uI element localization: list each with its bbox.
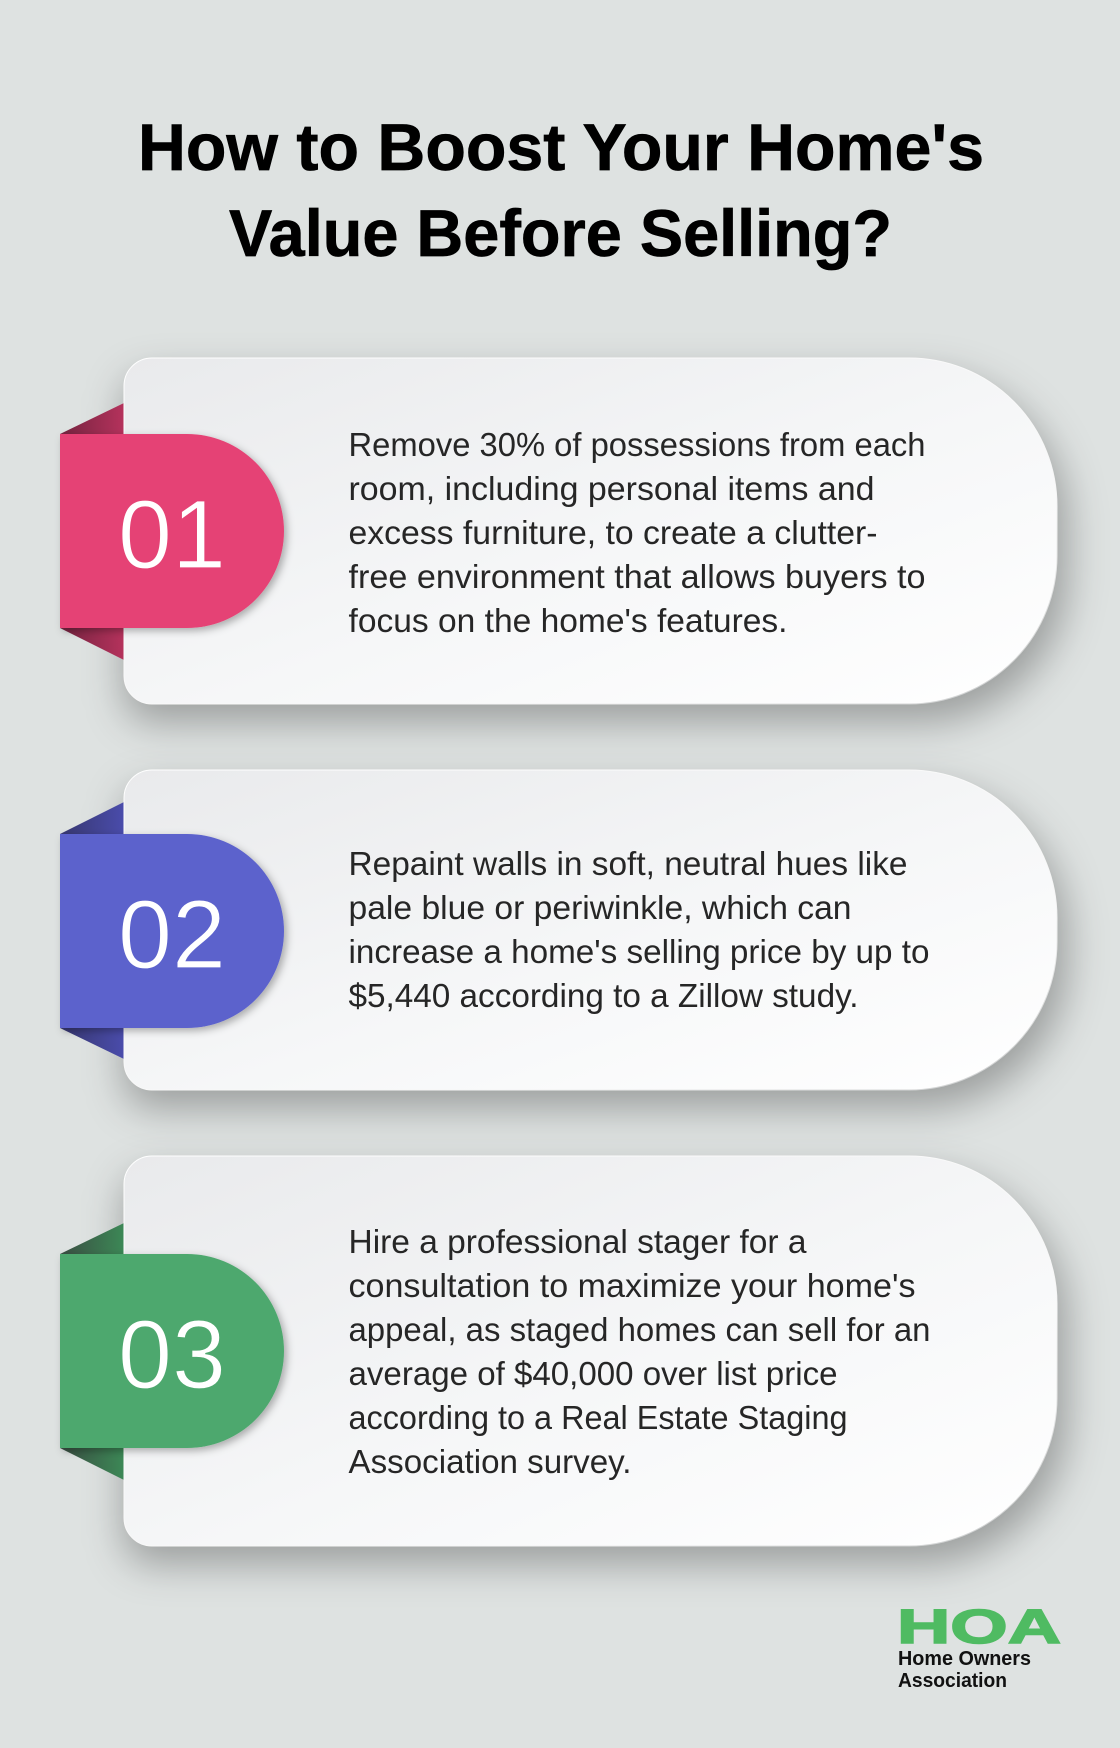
number badge 1 — [60, 434, 284, 628]
text block 2: Repaint walls in soft, neutral hues like — [348, 845, 908, 882]
ribbon fold 2 — [60, 802, 124, 1059]
logo: HOA Home Owners Association: Association — [898, 1670, 1007, 1692]
panel: step 1 — [60, 358, 1067, 722]
text block 3: according to a Real Estate Staging — [348, 1399, 848, 1436]
text block 1: free environment that allows buyers to — [348, 558, 926, 595]
logo: HOA Home Owners Association: Home Owners — [898, 1648, 1031, 1670]
card shadow 1 — [124, 376, 1067, 722]
number badge 1: 01 — [118, 480, 226, 589]
card shadow 3 — [124, 1174, 1067, 1564]
number badge 3: 03 — [118, 1300, 226, 1409]
text block 2 — [348, 845, 930, 1014]
logo: HOA Home Owners Association — [897, 1601, 1061, 1692]
number badge 2: 02 — [118, 880, 226, 989]
text block 3: consultation to maximize your home's — [348, 1267, 916, 1304]
text block 2: pale blue or periwinkle, which can — [348, 889, 852, 926]
logo: HOA Home Owners Association: HOA — [897, 1601, 1061, 1654]
panel: step 3 — [60, 1156, 1067, 1564]
card 2 — [124, 770, 1057, 1090]
text block 2: $5,440 according to a Zillow study. — [348, 977, 858, 1014]
title: Value Before Selling? — [229, 196, 892, 270]
text block 3 — [348, 1223, 930, 1480]
panel: step 2 — [60, 770, 1067, 1108]
text block 3: Hire a professional stager for a — [348, 1223, 807, 1260]
card shadow 2 — [124, 788, 1067, 1108]
title — [138, 110, 984, 270]
text block 1: room, including personal items and — [348, 470, 874, 507]
title: How to Boost Your Home's — [138, 110, 984, 184]
number badge 3 — [60, 1254, 284, 1448]
card 1 — [124, 358, 1057, 704]
number badge 2 — [60, 834, 284, 1028]
text block 3: average of $40,000 over list price — [348, 1355, 838, 1392]
text block 1: Remove 30% of possessions from each — [348, 426, 926, 463]
text block 3: Association survey. — [348, 1443, 632, 1480]
text block 1: excess furniture, to create a clutter- — [348, 514, 878, 551]
card 3 — [124, 1156, 1057, 1546]
ribbon fold 1 — [60, 403, 124, 660]
text block 1 — [348, 426, 926, 639]
ribbon fold 3 — [60, 1223, 124, 1480]
text block 2: increase a home's selling price by up to — [348, 933, 930, 970]
text block 1: focus on the home's features. — [348, 602, 788, 639]
text block 3: appeal, as staged homes can sell for an — [348, 1311, 930, 1348]
